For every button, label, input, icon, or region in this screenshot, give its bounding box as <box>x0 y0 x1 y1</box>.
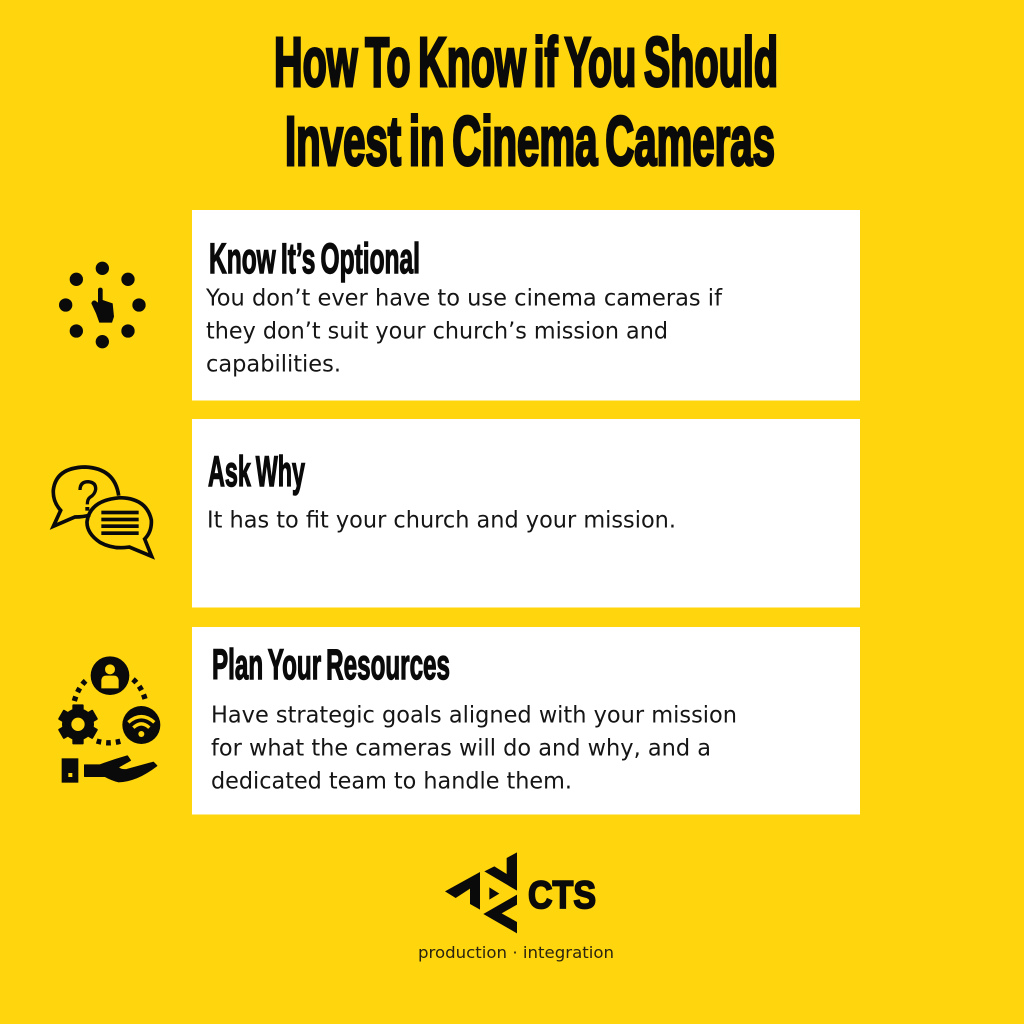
wifi badge <box>122 706 160 744</box>
text block: plan your resources <box>211 700 737 794</box>
panel: plan your resources <box>192 627 860 814</box>
text block: plan your resources: dedicated team to handle them. <box>211 766 572 794</box>
heading: ask why: Ask Why <box>208 448 305 496</box>
panel: ask why <box>192 419 860 608</box>
text block: know it's optional: they don’t suit your church’s mission and <box>206 316 668 344</box>
open hand <box>62 756 157 783</box>
text block: ask why: It has to fit your church and your mission. <box>207 506 676 534</box>
text block: plan your resources: Have strategic goals aligned with your mission <box>211 700 737 728</box>
logo wordmark: CTS <box>528 874 596 917</box>
text block: know it's optional: capabilities. <box>206 350 341 378</box>
icon: speech bubbles with question <box>53 467 152 556</box>
title <box>274 23 778 180</box>
logo mark <box>445 852 517 933</box>
icon: resources cycle with person, gear, wifi and hand <box>58 656 160 783</box>
text block: know it's optional <box>205 284 723 378</box>
dotted connectors <box>74 679 146 743</box>
text block: know it's optional: You don’t ever have to use cinema cameras if <box>205 284 723 312</box>
logo: CTS production integration <box>418 852 614 962</box>
heading: know it's optional: Know It’s Optional <box>209 235 420 283</box>
gear <box>58 704 98 744</box>
logo tagline: production · integration <box>418 943 614 962</box>
icon: hand pointing with ring of dots <box>59 262 146 348</box>
person badge <box>91 656 129 695</box>
heading: plan your resources: Plan Your Resources <box>212 641 450 689</box>
text block: plan your resources: for what the cameras will do and why, and a <box>211 734 711 762</box>
panel: know it's optional <box>192 210 860 400</box>
